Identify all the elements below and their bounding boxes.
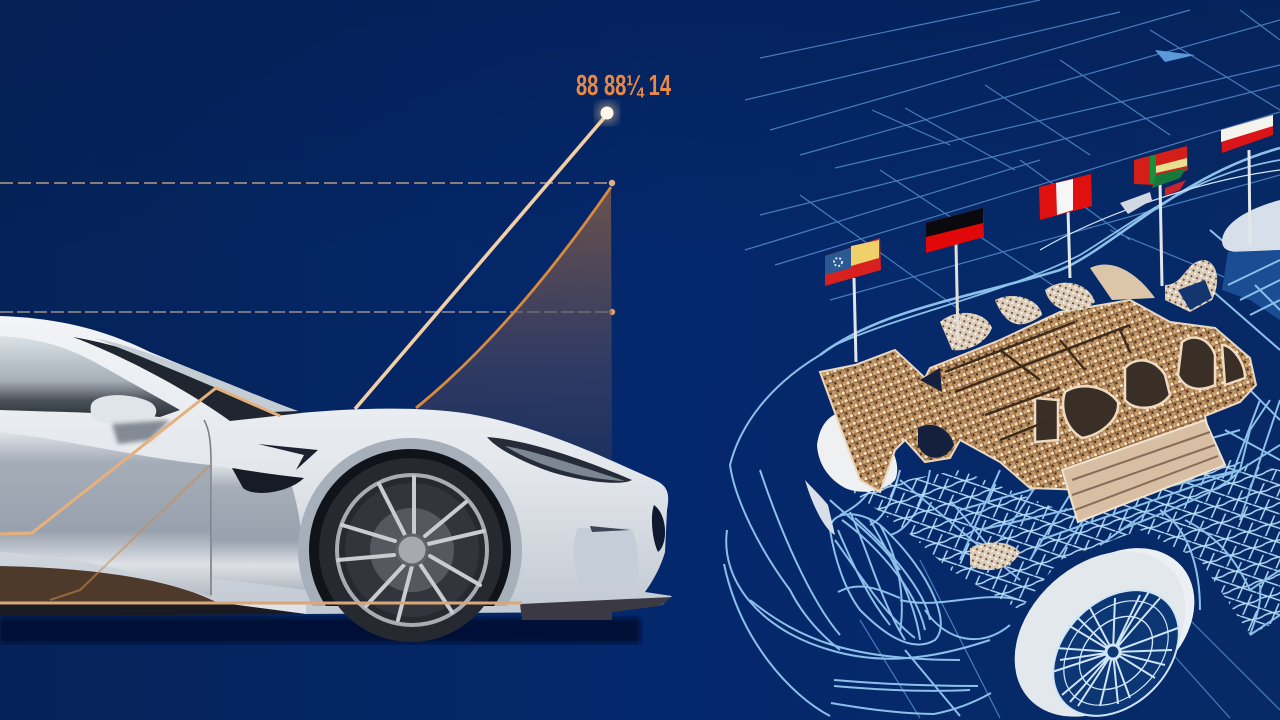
- flag: red white red: [1039, 174, 1092, 278]
- exploded wheel: [982, 518, 1223, 720]
- chart: shaded triangle: [416, 187, 612, 460]
- wheel arch: [298, 438, 522, 606]
- dark cylinder ports: [1035, 338, 1245, 442]
- rim: [337, 475, 487, 625]
- perspective grid: [745, 0, 1280, 718]
- wire mesh under engine: [850, 460, 1280, 635]
- engine block: [820, 300, 1256, 505]
- car body: [0, 316, 672, 614]
- front wheel well: [830, 514, 941, 645]
- chart: dashed guide lines: [0, 180, 615, 315]
- flag: black and red: [926, 208, 984, 340]
- door panel: [0, 432, 212, 597]
- white cylinder: [817, 412, 897, 492]
- engine rib rows: [945, 322, 1130, 440]
- chart value label: 88 88¼ 14: [576, 70, 671, 102]
- car: [0, 316, 672, 662]
- dark recess: [918, 425, 954, 458]
- door seam: [204, 420, 211, 595]
- outer body lines: [730, 355, 840, 650]
- strut lines: [900, 430, 1240, 580]
- windshield: [73, 337, 302, 421]
- orange overlay chart lines: [0, 388, 280, 534]
- front intake: [574, 528, 638, 585]
- underbody: [0, 566, 300, 612]
- engine: [820, 260, 1256, 570]
- flag: white and red: [1221, 115, 1273, 246]
- chart: rising line with glowing tip: [355, 102, 618, 409]
- front splitter: [520, 597, 672, 620]
- wireframe car: [724, 148, 1280, 716]
- flag: red green yellow: [1120, 146, 1188, 286]
- wireframe panel: rear: [1222, 200, 1280, 320]
- flag: striped with emblem: [825, 238, 881, 362]
- grid highlight: [1155, 50, 1195, 62]
- ground shadow: [0, 618, 640, 643]
- tyre: [319, 458, 503, 642]
- mirror: [91, 395, 156, 423]
- side vent: [258, 444, 318, 470]
- side window: [0, 336, 180, 417]
- lower sump: [970, 542, 1020, 570]
- top blocks: [940, 313, 992, 350]
- front flank: [212, 465, 305, 590]
- lower tray: [1062, 420, 1225, 522]
- pale fender: [805, 480, 835, 535]
- rear section wires: [1200, 230, 1280, 350]
- headlight: [487, 437, 632, 483]
